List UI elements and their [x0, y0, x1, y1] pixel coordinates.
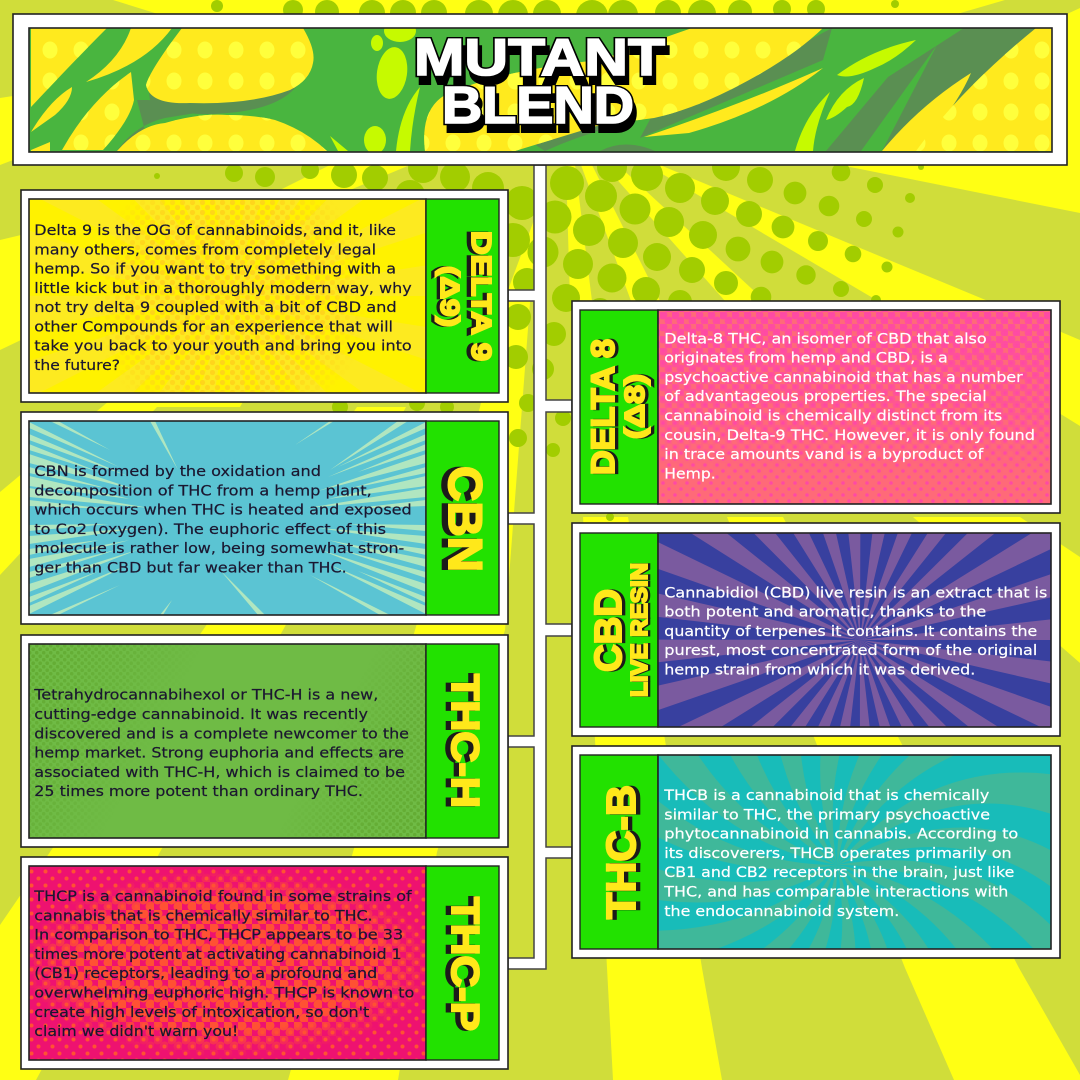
text: THC-H description: Tetrahydrocannabihexol or THC-H is a new,: [33, 688, 378, 704]
text: THC-B description: the endocannabinoid system.: [664, 904, 899, 920]
text: THC-H description: [33, 688, 409, 800]
text: CBN description: molecule is rather low, being somewhat stron-: [34, 541, 404, 557]
label: CBN: CBN: [439, 466, 492, 572]
text: CBN description: [34, 464, 412, 576]
label: CBD Live Resin: CBD: [588, 589, 630, 672]
connector: branching white lines: [508, 165, 572, 969]
label: Delta 9: (Δ9): [435, 266, 465, 327]
text: CBD description: Cannabidiol (CBD) live resin is an extract that is: [664, 585, 1047, 601]
panel: Delta 9: [20, 189, 509, 403]
text: THC-P description: times more potent at activating cannabinoid 1: [34, 947, 402, 963]
text: THC-P description: In comparison to THC, THCP appears to be 33: [34, 928, 403, 944]
label: THC-B: [580, 755, 658, 949]
label: Delta 9: [426, 199, 499, 393]
panel: CBN: [21, 412, 508, 624]
header banner: [13, 14, 1067, 165]
label: THC-B: THC-B: [602, 785, 648, 919]
title: MUTANT: [417, 37, 668, 95]
panel: Delta 8: [572, 301, 1060, 513]
background: pink halftone: [658, 310, 1051, 504]
label: CBD Live Resin: CBD: [591, 589, 633, 672]
text: THC-B description: similar to THC, the primary psychoactive: [664, 807, 990, 823]
background: purple sunburst: [657, 532, 1052, 728]
title: BLEND: [442, 77, 634, 135]
text: CBD description: quantity of terpenes it contains. It contains the: [664, 624, 1037, 640]
text: THC-B description: CB1 and CB2 receptors in the brain, just like: [664, 865, 1014, 881]
text: THC-H description: discovered and is a complete newcomer to the: [34, 726, 409, 742]
label: THC-H: [426, 644, 499, 838]
text: Delta 9 description: other Compounds for an experience that will: [34, 319, 393, 335]
text: CBD description: purest, most concentrated form of the original: [664, 643, 1037, 659]
title: MUTANT: [414, 29, 665, 87]
label: Delta 8: (Δ8): [622, 374, 653, 439]
text: CBN description: to Co2 (oxygen). The euphoric effect of this: [34, 522, 386, 538]
text: THC-B description: THCB is a cannabinoid that is chemically: [663, 788, 990, 804]
text: Delta 8 description: [664, 331, 1035, 482]
text: Delta 9 description: many others, comes from completely legal: [34, 242, 376, 258]
label: THC-H: THC-H: [438, 674, 481, 808]
text: Delta 9 description: not try delta 9 coupled with a bit of CBD and: [34, 300, 397, 316]
background: teal swirl: [657, 754, 1052, 950]
text: THC-P description: overwhelming euphoric high. THCP is known to: [34, 986, 414, 1002]
background: yellow burst with halftone: [28, 198, 427, 394]
panel: THC-P: [21, 857, 508, 1069]
text: THC-P description: [33, 889, 414, 1040]
label: THC-P: [426, 866, 499, 1060]
label: Delta 8: DELTA 8: [588, 339, 624, 475]
text: THC-B description: THC, and has comparable interactions with: [663, 884, 1008, 900]
text: THC-H description: cutting-edge cannabinoid. It was recently: [34, 707, 368, 723]
background: magenta halftone: [29, 866, 426, 1060]
title: BLEND: [445, 85, 637, 143]
text: Delta 8 description: Delta-8 THC, an isomer of CBD that also: [664, 331, 987, 347]
panel: THC-B: [571, 745, 1061, 959]
text: CBN description: ger than CBD but far weaker than THC.: [34, 560, 347, 576]
text: Delta 9 description: the future?: [34, 358, 120, 374]
label: CBD Live Resin: LIVE RESIN: [626, 563, 652, 697]
text: Delta 9 description: take you back to your youth and bring you into: [34, 338, 412, 354]
text: Delta 8 description: cousin, Delta-9 THC. However, it is only found: [664, 428, 1035, 444]
text: THC-P description: THCP is a cannabinoid found in some strains of: [33, 889, 413, 905]
text: CBN description: which occurs when THC is heated and exposed: [34, 503, 412, 519]
text: Delta 8 description: originates from hemp and CBD, is a: [664, 351, 948, 367]
text: Delta 8 description: psychoactive cannabinoid that has a number: [664, 370, 1023, 386]
text: Delta 8 description: of advantageous properties. The special: [664, 389, 987, 405]
title: [414, 29, 668, 143]
text: THC-B description: [663, 788, 1018, 920]
text: CBN description: CBN is formed by the oxidation and: [34, 464, 321, 480]
text: THC-H description: hemp market. Strong euphoria and effects are: [34, 746, 404, 762]
text: Delta 8 description: cannabinoid is chemically distinct from its: [664, 408, 1002, 424]
text: CBD description: both potent and aromatic, thanks to the: [664, 605, 986, 621]
text: THC-P description: cannabis that is chemically similar to THC.: [34, 908, 373, 924]
text: THC-B description: phytocannabinoid in cannabis. According to: [664, 827, 1018, 843]
text: CBD description: hemp strain from which it was derived.: [664, 662, 975, 678]
label: CBN: [426, 421, 499, 615]
panel: CBD Live Resin: [571, 522, 1061, 737]
label: CBD Live Resin: [580, 533, 658, 727]
text: Delta 8 description: Hemp.: [664, 466, 716, 482]
label: Delta 8: [580, 310, 658, 504]
background: green halftone: [29, 644, 426, 838]
title: MUTANT: [414, 29, 665, 87]
text: THC-H description: associated with THC-H, which is claimed to be: [34, 765, 405, 781]
text: THC-P description: (CB1) receptors, leading to a profound and: [34, 966, 377, 982]
text: Delta 9 description: Delta 9 is the OG of cannabinoids, and it, like: [34, 223, 396, 239]
label: THC-P: THC-P: [443, 897, 486, 1031]
text: THC-P description: claim we didn't warn you!: [34, 1024, 238, 1040]
panel: THC-H: [21, 635, 508, 847]
label: Delta 8: DELTA 8: [585, 339, 621, 475]
label: CBD Live Resin: LIVE RESIN: [628, 563, 654, 697]
text: CBD description: [664, 585, 1047, 678]
text: Delta 9 description: [34, 223, 412, 374]
label: THC-P: THC-P: [438, 897, 481, 1031]
label: Delta 9: DELTA 9: [466, 231, 497, 361]
text: THC-P description: create high levels of intoxication, so don't: [34, 1005, 370, 1021]
text: Delta 9 description: little kick but in a thoroughly modern way, why: [34, 281, 412, 297]
text: CBN description: decomposition of THC from a hemp plant,: [34, 483, 372, 499]
text: THC-B description: its discoverers, THCB operates primarily on: [664, 846, 1012, 862]
text: Delta 8 description: in trace amounts vand is a byproduct of: [664, 447, 984, 463]
text: Delta 9 description: hemp. So if you want to try something with a: [34, 262, 396, 278]
label: CBN: CBN: [433, 466, 486, 572]
label: Delta 8: (Δ8): [619, 374, 650, 439]
text: THC-H description: 25 times more potent than ordinary THC.: [34, 784, 363, 800]
label: THC-B: THC-B: [598, 785, 644, 919]
title: BLEND: [442, 77, 634, 135]
label: Delta 9: (Δ9): [432, 266, 462, 327]
background: blue speed lines: [29, 421, 426, 615]
label: Delta 9: DELTA 9: [462, 231, 493, 361]
label: THC-H: THC-H: [443, 674, 486, 808]
